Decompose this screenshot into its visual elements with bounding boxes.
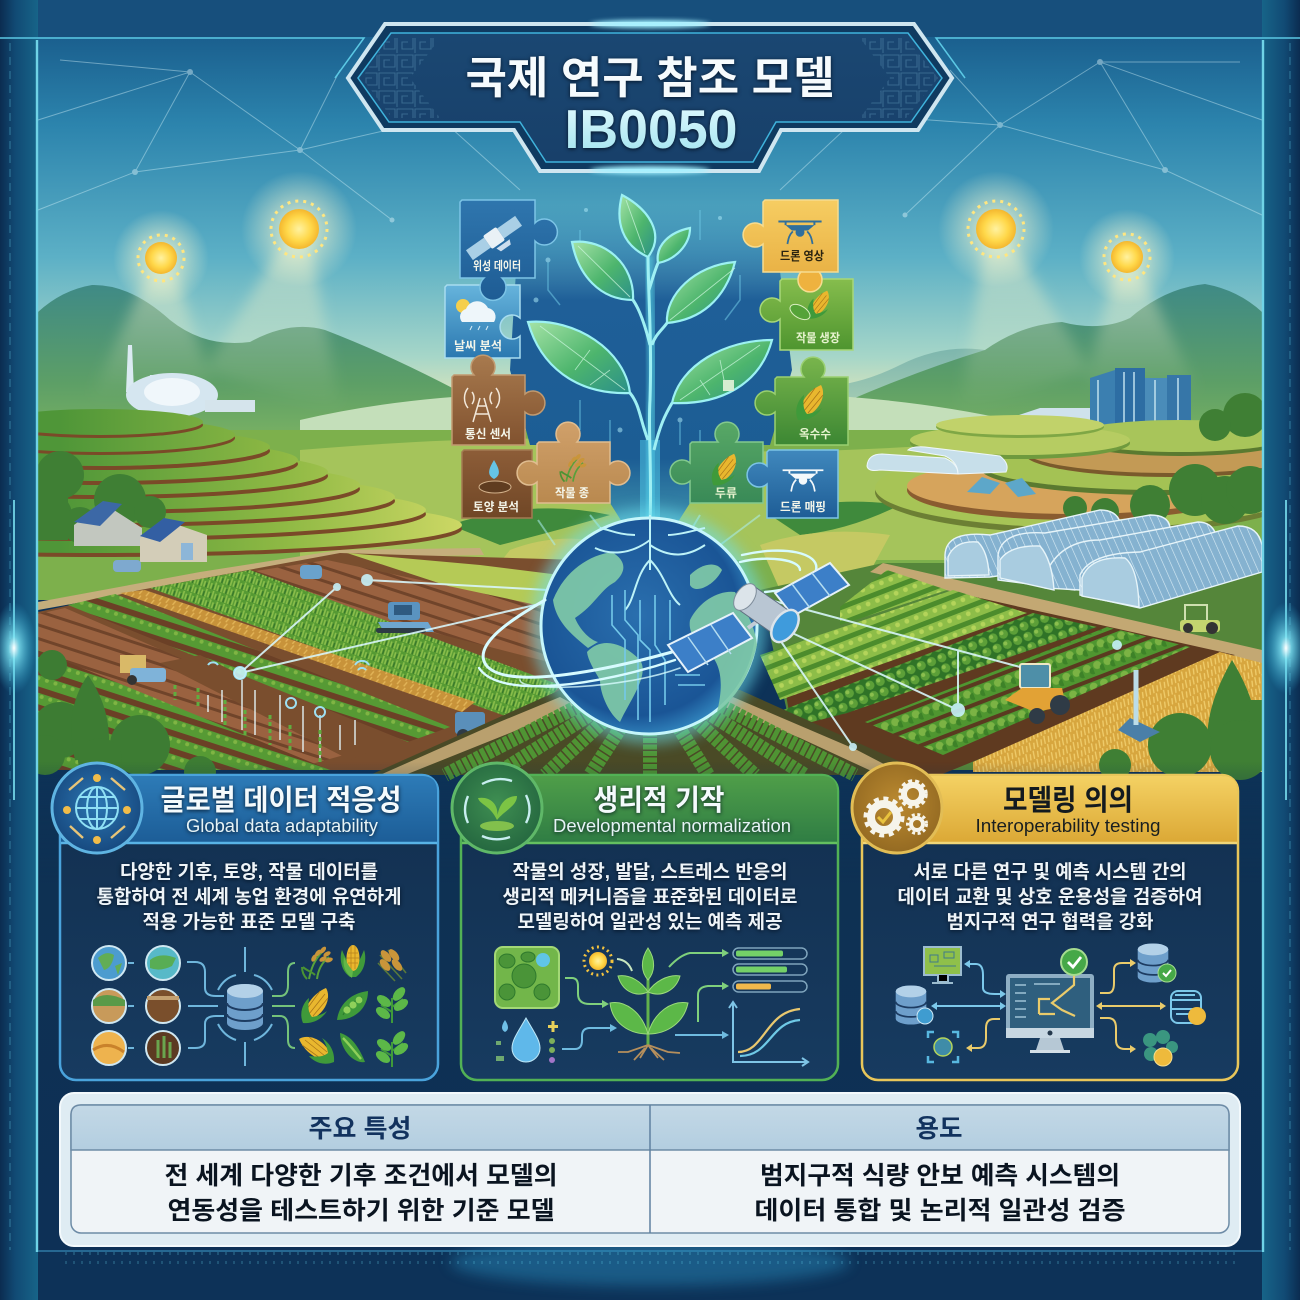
panel heading: 글로벌 데이터 적응성: [160, 784, 402, 817]
diagram: data hub: [92, 945, 410, 1067]
icon: sprout cycle: [452, 763, 542, 853]
icon: globe with arrows: [52, 763, 142, 853]
diagram: system interoperability: [896, 943, 1206, 1066]
panel heading: 모델링 의의: [1003, 784, 1133, 817]
panel description: [502, 861, 798, 933]
panel subheading: Interoperability testing: [976, 816, 1160, 836]
table cell: use text: 데이터 통합 및 논리적 일관성 검증: [754, 1197, 1126, 1225]
table cell: use text: [754, 1162, 1126, 1225]
panel description: 범지구적 연구 협력을 강화: [946, 911, 1154, 933]
table cell: key features text: 전 세계 다양한 기후 조건에서 모델의: [164, 1162, 558, 1190]
midground fields: [38, 430, 1262, 600]
table header: use: 용도: [916, 1115, 962, 1143]
icon: gears: [852, 763, 942, 853]
panel description: 데이터 교환 및 상호 운용성을 검증하여: [898, 886, 1202, 908]
crop fields, left: [38, 553, 580, 770]
city towers, right hill: [1010, 368, 1191, 425]
sprouting plant: [528, 195, 772, 525]
puzzle piece: crop species: 작물 종: [555, 486, 589, 500]
puzzle piece: legumes: [670, 422, 763, 503]
main title: 국제 연구 참조 모델: [466, 54, 834, 103]
terraced hill, right: [867, 415, 1300, 534]
puzzle piece: soil analysis: 토양 분석: [473, 500, 519, 514]
research facility, left hill: [126, 345, 255, 417]
panel heading: 생리적 기작: [594, 784, 724, 817]
satellite over globe: [668, 563, 849, 672]
diagram: plant physiology: [495, 947, 808, 1066]
table header: key features: 주요 특성: [308, 1115, 412, 1143]
panel description: 작물의 성장, 발달, 스트레스 반응의: [512, 861, 788, 883]
glowing globe: [531, 508, 767, 744]
puzzle piece: corn: 옥수수: [799, 427, 831, 441]
panel description: 적용 가능한 표준 모델 구축: [142, 911, 356, 933]
puzzle piece: weather data: 날씨 분석: [454, 339, 502, 353]
trees, lower left: [25, 650, 216, 788]
panel description: [898, 861, 1202, 933]
table cell: use text: 범지구적 식량 안보 예측 시스템의: [760, 1162, 1120, 1190]
data lines from globe to fields: [234, 515, 1122, 751]
dark circuit backdrop behind plant: [510, 205, 792, 522]
tractors and field machines: [120, 565, 1220, 741]
road and fields, right: [760, 563, 1270, 781]
panel description: 모델링하여 일관성 있는 예측 제공: [518, 911, 782, 933]
suns with light rays: [90, 171, 1200, 410]
puzzle piece: tower sensor: 통신 센서: [465, 427, 511, 441]
table cell: key features text: 연동성을 테스트하기 위한 기준 모델: [168, 1197, 554, 1225]
mountains: [38, 284, 1262, 455]
network constellation in sky: [38, 59, 1262, 222]
greenhouses: [945, 510, 1262, 608]
table cell: key features text: [164, 1162, 558, 1225]
circuit lines behind plant: [534, 208, 748, 460]
panel description: 통합하여 전 세계 농업 환경에 유연하게: [96, 886, 402, 908]
panel description: 생리적 메커니즘을 표준화된 데이터로: [502, 886, 798, 908]
title banner: [348, 20, 952, 174]
panel subheading: Developmental normalization: [553, 816, 791, 836]
puzzle piece: drone imagery: 드론 영상: [780, 249, 824, 263]
puzzle piece: crop growth: 작물 생장: [796, 331, 840, 345]
panel subheading: Global data adaptability: [186, 816, 378, 836]
sky: [38, 37, 1262, 437]
panel description: 서로 다른 연구 및 예측 시스템 간의: [914, 861, 1186, 883]
puzzle piece: weather data: [454, 299, 502, 353]
centre crop rows: [370, 690, 930, 775]
summary table: [60, 1093, 1240, 1246]
panel: interoperability testing: [852, 763, 1238, 1080]
puzzle piece: crop growth: [760, 272, 853, 350]
panel: developmental normalization: [452, 763, 838, 1080]
puzzle piece: crop species: [517, 422, 630, 503]
puzzle piece: drone mapping: [747, 450, 838, 518]
puzzle piece: drone mapping: 드론 매핑: [780, 499, 826, 514]
solar barns, left: [74, 501, 207, 572]
panel: global data adaptability: [52, 763, 438, 1080]
puzzle piece: satellite data: 위성 데이터: [473, 259, 521, 273]
puzzle piece: corn: [755, 357, 848, 445]
puzzle piece: soil analysis: [462, 450, 532, 518]
puzzle piece: legumes: 두류: [715, 486, 737, 500]
panel description: 다양한 기후, 토양, 작물 데이터를: [120, 861, 378, 883]
dark lower background: [38, 762, 1262, 1252]
terraced hill, left: [0, 409, 462, 557]
road, left: [38, 548, 484, 610]
panel description: [96, 861, 402, 933]
orbit rings: [479, 551, 816, 687]
puzzle piece: satellite data: [445, 200, 557, 358]
tree clusters: [28, 393, 1274, 543]
puzzle piece: tower sensor: [452, 355, 545, 445]
puzzle piece: drone imagery: [743, 200, 838, 292]
model code: IB0050: [564, 98, 738, 160]
